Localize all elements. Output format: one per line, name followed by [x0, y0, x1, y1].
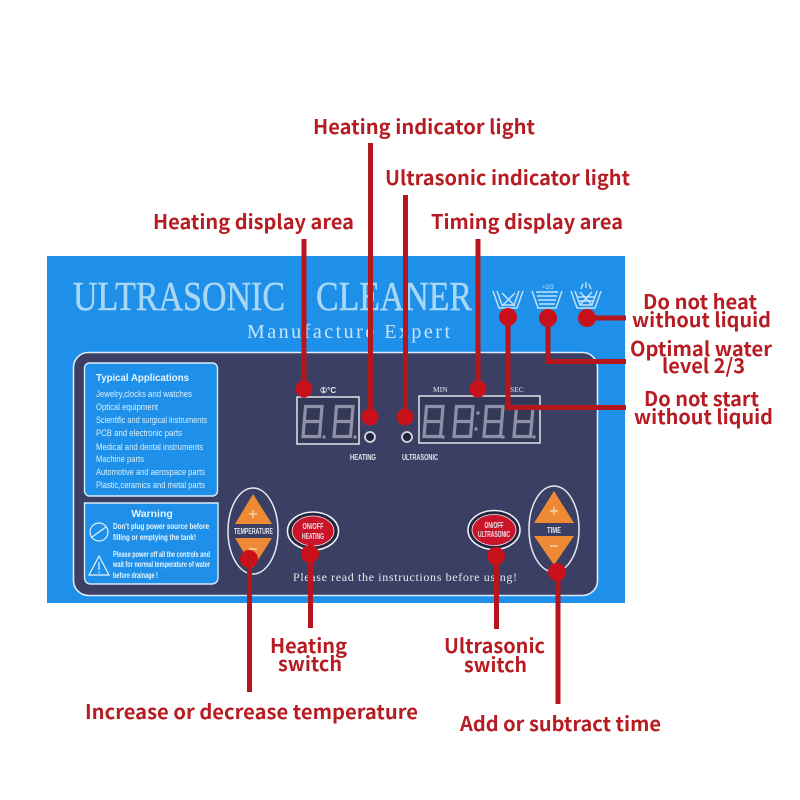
- label: heating indicator light: Heating indicator light: [313, 111, 536, 140]
- ultrasonic LED: ULTRASONIC: [402, 453, 438, 462]
- timer labels: [433, 385, 524, 394]
- label: heating switch: [270, 630, 347, 677]
- label: add or subtract time: Add or subtract time: [459, 708, 661, 737]
- callout line: time buttons: [548, 563, 566, 704]
- applications list: Machine parts: [96, 454, 144, 464]
- temperature display: [297, 397, 359, 444]
- icon: do not heat without liquid basin: [571, 282, 601, 308]
- label: ultrasonic switch: Ultrasonic: [444, 630, 545, 659]
- label: do not start without liquid: without liquid: [634, 401, 773, 430]
- ultrasonic LED: [402, 432, 438, 462]
- warning text: power off: [112, 550, 210, 580]
- label: ultrasonic switch: switch: [464, 649, 527, 678]
- warning text: power source: [113, 522, 209, 542]
- temperature buttons: [228, 488, 278, 574]
- callout line: heating switch: [301, 545, 319, 628]
- icon: optimal water level basin: [532, 285, 562, 308]
- panel: typical applications: [84, 363, 218, 496]
- time buttons: TIME: [547, 526, 561, 535]
- timer labels: SEC: [510, 385, 524, 394]
- label: do not start without liquid: Do not start: [644, 383, 760, 412]
- label: do not heat without liquid: Do not heat: [643, 286, 758, 315]
- label: optimal water level: level 2/3: [662, 350, 745, 379]
- callout line: do not start without liquid: [499, 308, 626, 408]
- panel subtitle: Manufacture Expert: [247, 321, 450, 343]
- temperature buttons: TEMPERATURE: [234, 527, 273, 536]
- label: ultrasonic indicator light: Ultrasonic indicator light: [385, 162, 631, 191]
- warning text: power source: Don't plug power source before: [113, 522, 209, 531]
- label: do not start without liquid: [634, 383, 773, 430]
- label: optimal water level: [630, 333, 772, 379]
- temperature unit label: ①°C: [320, 386, 336, 395]
- applications list: Jewelry,clocks and watches: [96, 389, 192, 399]
- heating on/off button: HEATING: [302, 532, 324, 541]
- label: heating switch: switch: [278, 648, 342, 677]
- heating on/off button: ON/OFF: [302, 522, 324, 531]
- label: heating switch: Heating: [270, 630, 347, 659]
- warning text: power off: Please power off all the controls and: [113, 550, 210, 559]
- label: heating display area: Heating display area: [153, 206, 354, 235]
- applications list: Medical and dental instruments: [96, 442, 203, 452]
- timer display: [419, 396, 540, 443]
- applications heading: Typical Applications: [96, 373, 189, 384]
- label: timing display area: Timing display area: [431, 206, 623, 235]
- timer labels: MIN: [433, 385, 448, 394]
- callout line: ultrasonic indicator light: [396, 195, 414, 426]
- applications list: Scientific and surgical instruments: [96, 415, 207, 425]
- icon: warning triangle: [89, 556, 109, 575]
- warning heading: Warning: [131, 508, 173, 520]
- label: do not heat without liquid: without liquid: [632, 304, 771, 333]
- panel: dark control face: [74, 352, 598, 596]
- label: ultrasonic switch: [444, 630, 545, 678]
- heating LED: HEATING: [350, 453, 376, 462]
- label: optimal water level: Optimal water: [630, 333, 772, 362]
- icon: prohibition sign: [90, 523, 108, 541]
- icon: optimal water level basin: ≈2/3: [542, 285, 554, 291]
- icon: do not start without liquid basin: [493, 291, 523, 308]
- callout line: optimal water level: [539, 309, 626, 362]
- panel: blue control panel: [47, 256, 625, 603]
- callout line: heating indicator light: [362, 143, 378, 426]
- callout line: ultrasonic switch: [487, 547, 505, 629]
- callout line: heating display area: [296, 239, 312, 398]
- warning text: power off: before drainage !: [113, 571, 158, 580]
- ultrasonic on/off button: ULTRASONIC: [478, 530, 510, 539]
- ultrasonic on/off button: [468, 510, 520, 550]
- callout line: temperature buttons: [240, 550, 258, 692]
- applications list: [96, 389, 207, 490]
- applications list: PCB and electronic parts: [96, 428, 182, 438]
- applications list: Optical equipment: [96, 402, 158, 412]
- panel title: CLEANER: [316, 273, 473, 319]
- panel: warning: [84, 503, 218, 584]
- label: do not heat without liquid: [632, 286, 771, 333]
- heating LED: [350, 432, 376, 462]
- panel title: ULTRASONIC: [73, 273, 285, 319]
- label: increase or decrease temperature: Increase or decrease temperature: [85, 696, 418, 725]
- warning text: power source: filling or emptying the tank!: [113, 533, 196, 542]
- callout line: do not heat without liquid: [578, 309, 626, 327]
- applications list: Plastic,ceramics and metal parts: [96, 480, 205, 490]
- ultrasonic on/off button: ON/OFF: [484, 521, 504, 530]
- panel title: [73, 273, 473, 319]
- applications list: Automotive and aerospace parts: [96, 467, 205, 477]
- instruction note: Please read the instructions before using!: [293, 570, 517, 584]
- warning text: power off: wait for normal temperature of water: [112, 560, 210, 569]
- time buttons: [529, 486, 579, 572]
- heating on/off button: [288, 512, 338, 550]
- callout line: timing display area: [470, 239, 486, 398]
